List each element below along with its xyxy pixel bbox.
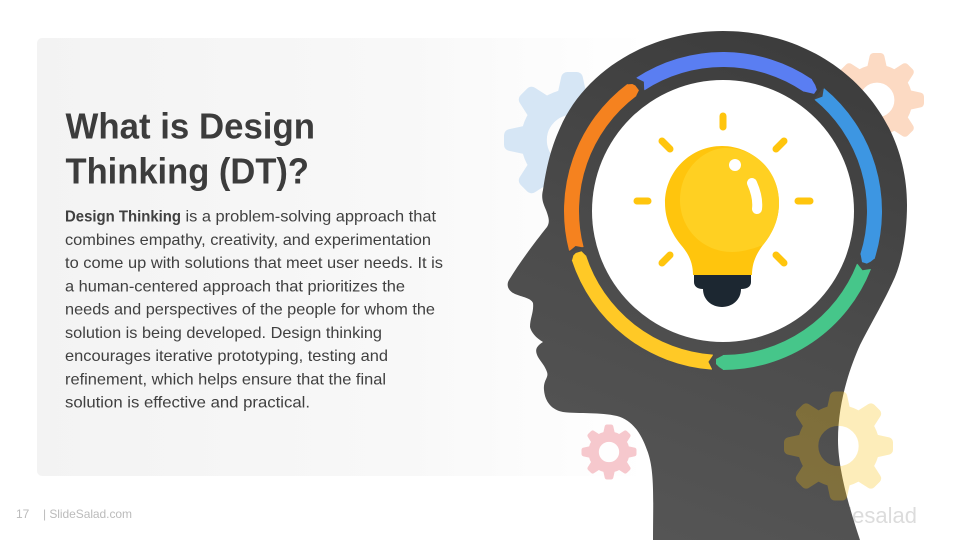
- rays: [637, 116, 810, 263]
- bulb inner light: [680, 148, 779, 252]
- text block: definition of design thinking: encourages iterative prototyping, testing and: [65, 348, 388, 365]
- footer: page number and site: | SlideSalad.com: [43, 507, 132, 521]
- panel: text background: [37, 38, 647, 476]
- cycle ring of arrows: [510, 0, 936, 424]
- bulb highlights: [729, 159, 741, 171]
- text block: definition of design thinking: solution is effective and practical.: [65, 394, 310, 412]
- text block: definition of design thinking: refinement, which helps ensure that the final: [65, 371, 386, 388]
- bulb base: [694, 275, 751, 307]
- text block: definition of design thinking: needs and perspectives of the people for whom the: [65, 302, 435, 318]
- watermark: slidesalad logo text: slidesalad: [819, 503, 917, 528]
- title: What is Design: [66, 106, 315, 146]
- title: [66, 106, 315, 192]
- footer: page number and site: 17: [16, 507, 30, 521]
- text block: definition of design thinking: Design Thinking: [65, 208, 181, 226]
- arrow: blue arc: [513, 1, 933, 421]
- icon: yellow gear overlapping neck: [789, 396, 888, 496]
- text block: definition of design thinking: to come up with solutions that meet user needs. It is: [65, 255, 443, 272]
- text block: definition of design thinking: solution is being developed. Design thinking: [65, 325, 382, 342]
- arrow: light blue arc: [510, 0, 936, 424]
- arrow: yellow arc: [561, 49, 885, 373]
- title: Thinking (DT)?: [66, 150, 309, 192]
- icon: orange gear: [834, 57, 920, 143]
- arrow: green arc: [527, 15, 919, 407]
- arrow: orange arc: [538, 26, 908, 396]
- icon: light bulb with rays: [637, 116, 810, 307]
- bulb glass: [665, 146, 779, 275]
- head silhouette: [508, 31, 907, 540]
- text block: definition of design thinking: combines empathy, creativity, and experimentation: [65, 232, 431, 249]
- text block: definition of design thinking: [65, 208, 443, 412]
- icon: blue gear: [510, 78, 634, 202]
- text block: definition of design thinking: a human-centered approach that prioritizes the: [65, 278, 405, 295]
- white circle behind the bulb: [592, 80, 854, 342]
- icon: pink gear: [584, 427, 634, 477]
- text block: definition of design thinking: is a problem-solving approach that: [186, 208, 437, 226]
